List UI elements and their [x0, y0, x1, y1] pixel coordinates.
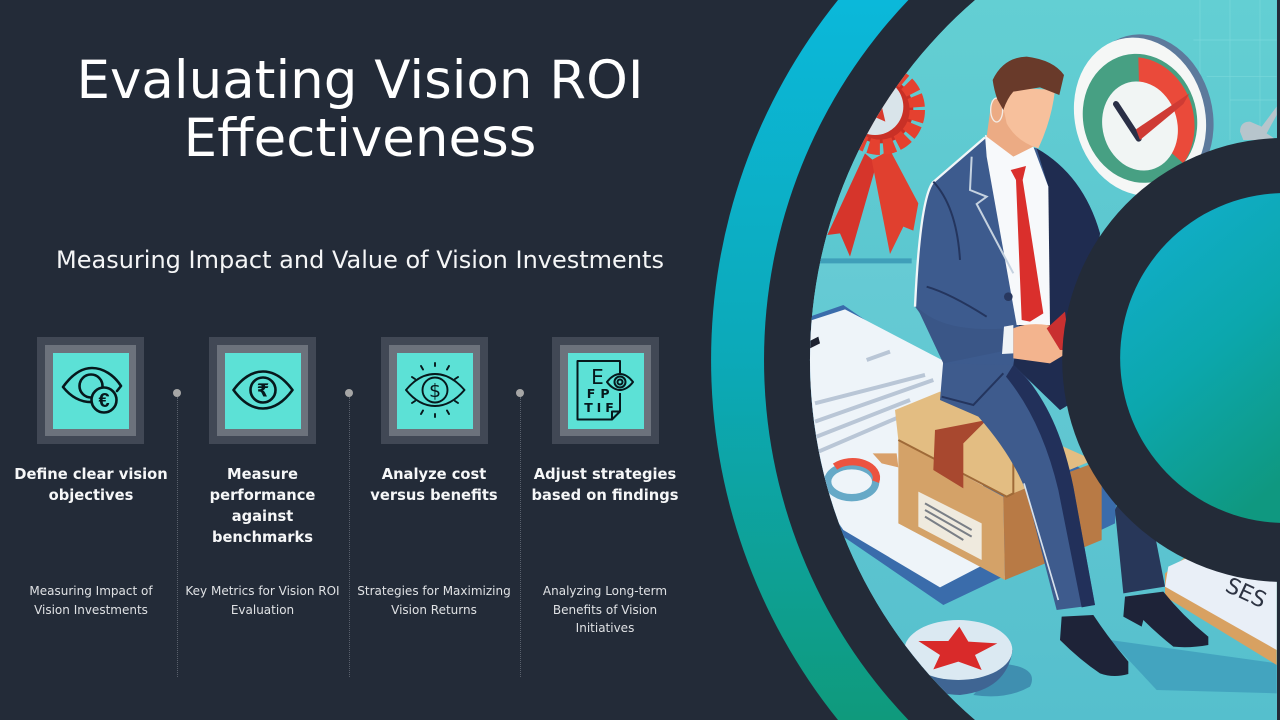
- step 2 description: [185, 584, 340, 616]
- dark gap ring: [764, 0, 1280, 720]
- icon tile: eye with rupee: ₹: [257, 380, 269, 402]
- title: Effectiveness: [184, 108, 536, 169]
- icon tile: eye chart document: I: [597, 400, 601, 415]
- clipboard and report: [800, 305, 1117, 605]
- step divider 3: [516, 389, 524, 677]
- icon tile: eye with euro coin: €: [98, 390, 110, 412]
- step 3 description: Strategies for Maximizing: [357, 584, 511, 598]
- step 4 description: Benefits of Vision: [553, 602, 657, 616]
- icon tile: eye chart document: F: [587, 386, 595, 401]
- businessman hand and phone: [1002, 312, 1070, 363]
- step 3 heading: [370, 466, 498, 504]
- step 4 heading: based on findings: [531, 487, 679, 504]
- icon tile: eye chart document: [552, 337, 659, 444]
- step 1 heading: objectives: [49, 487, 133, 504]
- icon tile: eye with dollar and rays: $: [428, 380, 441, 402]
- step 1 heading: Define clear vision: [14, 466, 168, 483]
- icon tile: eye with euro coin: [37, 337, 144, 444]
- step 2 heading: against: [232, 508, 293, 525]
- step 2 description: Key Metrics for Vision ROI: [185, 584, 340, 598]
- step 1 heading: [14, 466, 168, 504]
- icon tile: eye with rupee: [209, 337, 316, 444]
- businessman torso: [915, 135, 1100, 410]
- icon tile: eye chart document: E: [591, 365, 604, 389]
- step 2 heading: Measure: [227, 466, 298, 483]
- gauge check badge: [1074, 34, 1214, 195]
- step divider 1: [173, 389, 181, 677]
- step 3 description: [357, 584, 511, 616]
- step 4 heading: Adjust strategies: [534, 466, 676, 483]
- step 1 description: [29, 584, 153, 616]
- trouser front leg: [940, 360, 1095, 610]
- front shoe: [1060, 615, 1128, 676]
- icon tile: eye chart document: P: [600, 386, 610, 401]
- step 3 heading: Analyze cost: [382, 466, 486, 483]
- step 2 description: Evaluation: [231, 602, 294, 616]
- businessman head: [987, 57, 1064, 157]
- step 1 description: Measuring Impact of: [29, 584, 153, 598]
- step 3 description: Vision Returns: [391, 602, 477, 616]
- floor shadows: [1110, 640, 1277, 693]
- step 4 description: Analyzing Long-term: [543, 584, 667, 598]
- step 4 description: [543, 584, 667, 635]
- icon tile: eye with dollar and rays: [380, 337, 488, 444]
- subtitle: Measuring Impact and Value of Vision Investments: [56, 246, 664, 274]
- back leg and shoe: [1115, 506, 1208, 648]
- decorative circular illustration: [711, 0, 1280, 720]
- title: Evaluating Vision ROI: [77, 50, 643, 111]
- icon tile: eye chart document: T: [584, 400, 593, 415]
- right paper stack: SES: [1221, 573, 1270, 614]
- step 2 heading: performance: [210, 487, 315, 504]
- illustration: businessman with documents: [800, 0, 1277, 720]
- clamp: [1240, 107, 1277, 140]
- title: [77, 50, 643, 169]
- star coin: [904, 620, 1013, 695]
- cardboard box: [895, 392, 1102, 580]
- inner dark circle: [1062, 138, 1280, 582]
- right paper stack: [1165, 553, 1277, 665]
- step divider 2: [345, 389, 353, 677]
- ribbon award: [820, 73, 918, 263]
- icon tile: eye chart document: F: [605, 400, 614, 415]
- step 4 description: Initiatives: [576, 621, 634, 635]
- step 1 description: Vision Investments: [34, 602, 148, 616]
- step 3 heading: versus benefits: [370, 487, 498, 504]
- step 2 heading: [210, 466, 315, 546]
- inner teal circle: [1120, 193, 1280, 523]
- step 4 heading: [531, 466, 679, 504]
- step 2 heading: benchmarks: [212, 529, 313, 546]
- outer teal ring: [711, 0, 1280, 720]
